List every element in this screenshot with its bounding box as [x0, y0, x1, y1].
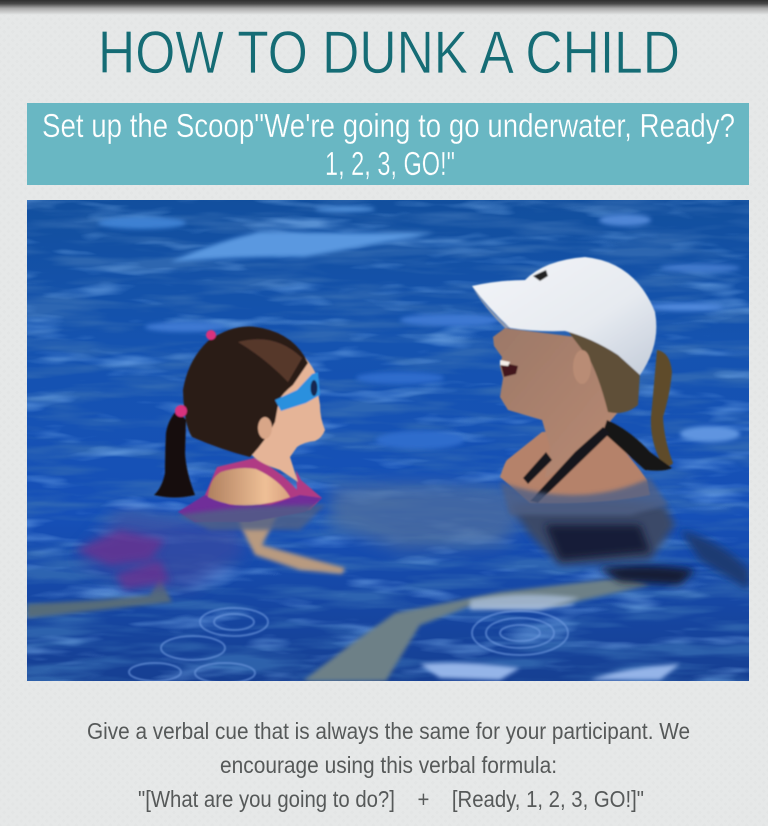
woman neck and face [492, 327, 618, 432]
cap [472, 257, 656, 375]
black tie behind neck [603, 420, 672, 471]
child hair [183, 327, 308, 457]
woman ear [573, 350, 591, 384]
banner: set up the scoop [27, 103, 749, 185]
ponytail [651, 350, 673, 466]
woman [472, 257, 673, 503]
child ear [258, 417, 272, 439]
child pigtail [154, 410, 195, 498]
photo: woman and child in a pool [27, 200, 749, 683]
child neck and face [245, 352, 325, 482]
woman shoulders [500, 428, 650, 503]
top shadow bar [0, 0, 768, 15]
banner: set up the scoop: 1, 2, 3, GO!" [325, 145, 455, 182]
ripple rings [129, 608, 568, 683]
child shoulder [208, 468, 290, 505]
goggles [275, 372, 320, 411]
title: HOW TO DUNK A CHILD [98, 19, 680, 86]
child [154, 327, 325, 522]
woman hair [567, 330, 640, 413]
swimsuit straps [523, 427, 610, 503]
body text: Give a verbal cue that is always the same for your participant. We [87, 718, 690, 744]
water [27, 200, 749, 681]
underwater arms and shadows [27, 483, 749, 681]
body text: encourage using this verbal formula: [220, 752, 557, 778]
waterline in front of bodies [178, 478, 668, 530]
child swimsuit [204, 457, 322, 510]
body text: "[What are you going to do?] + [Ready, 1, 2, 3, GO!]" [138, 786, 644, 812]
mouth [500, 362, 518, 377]
hair ties [206, 330, 216, 340]
body text [87, 718, 690, 812]
